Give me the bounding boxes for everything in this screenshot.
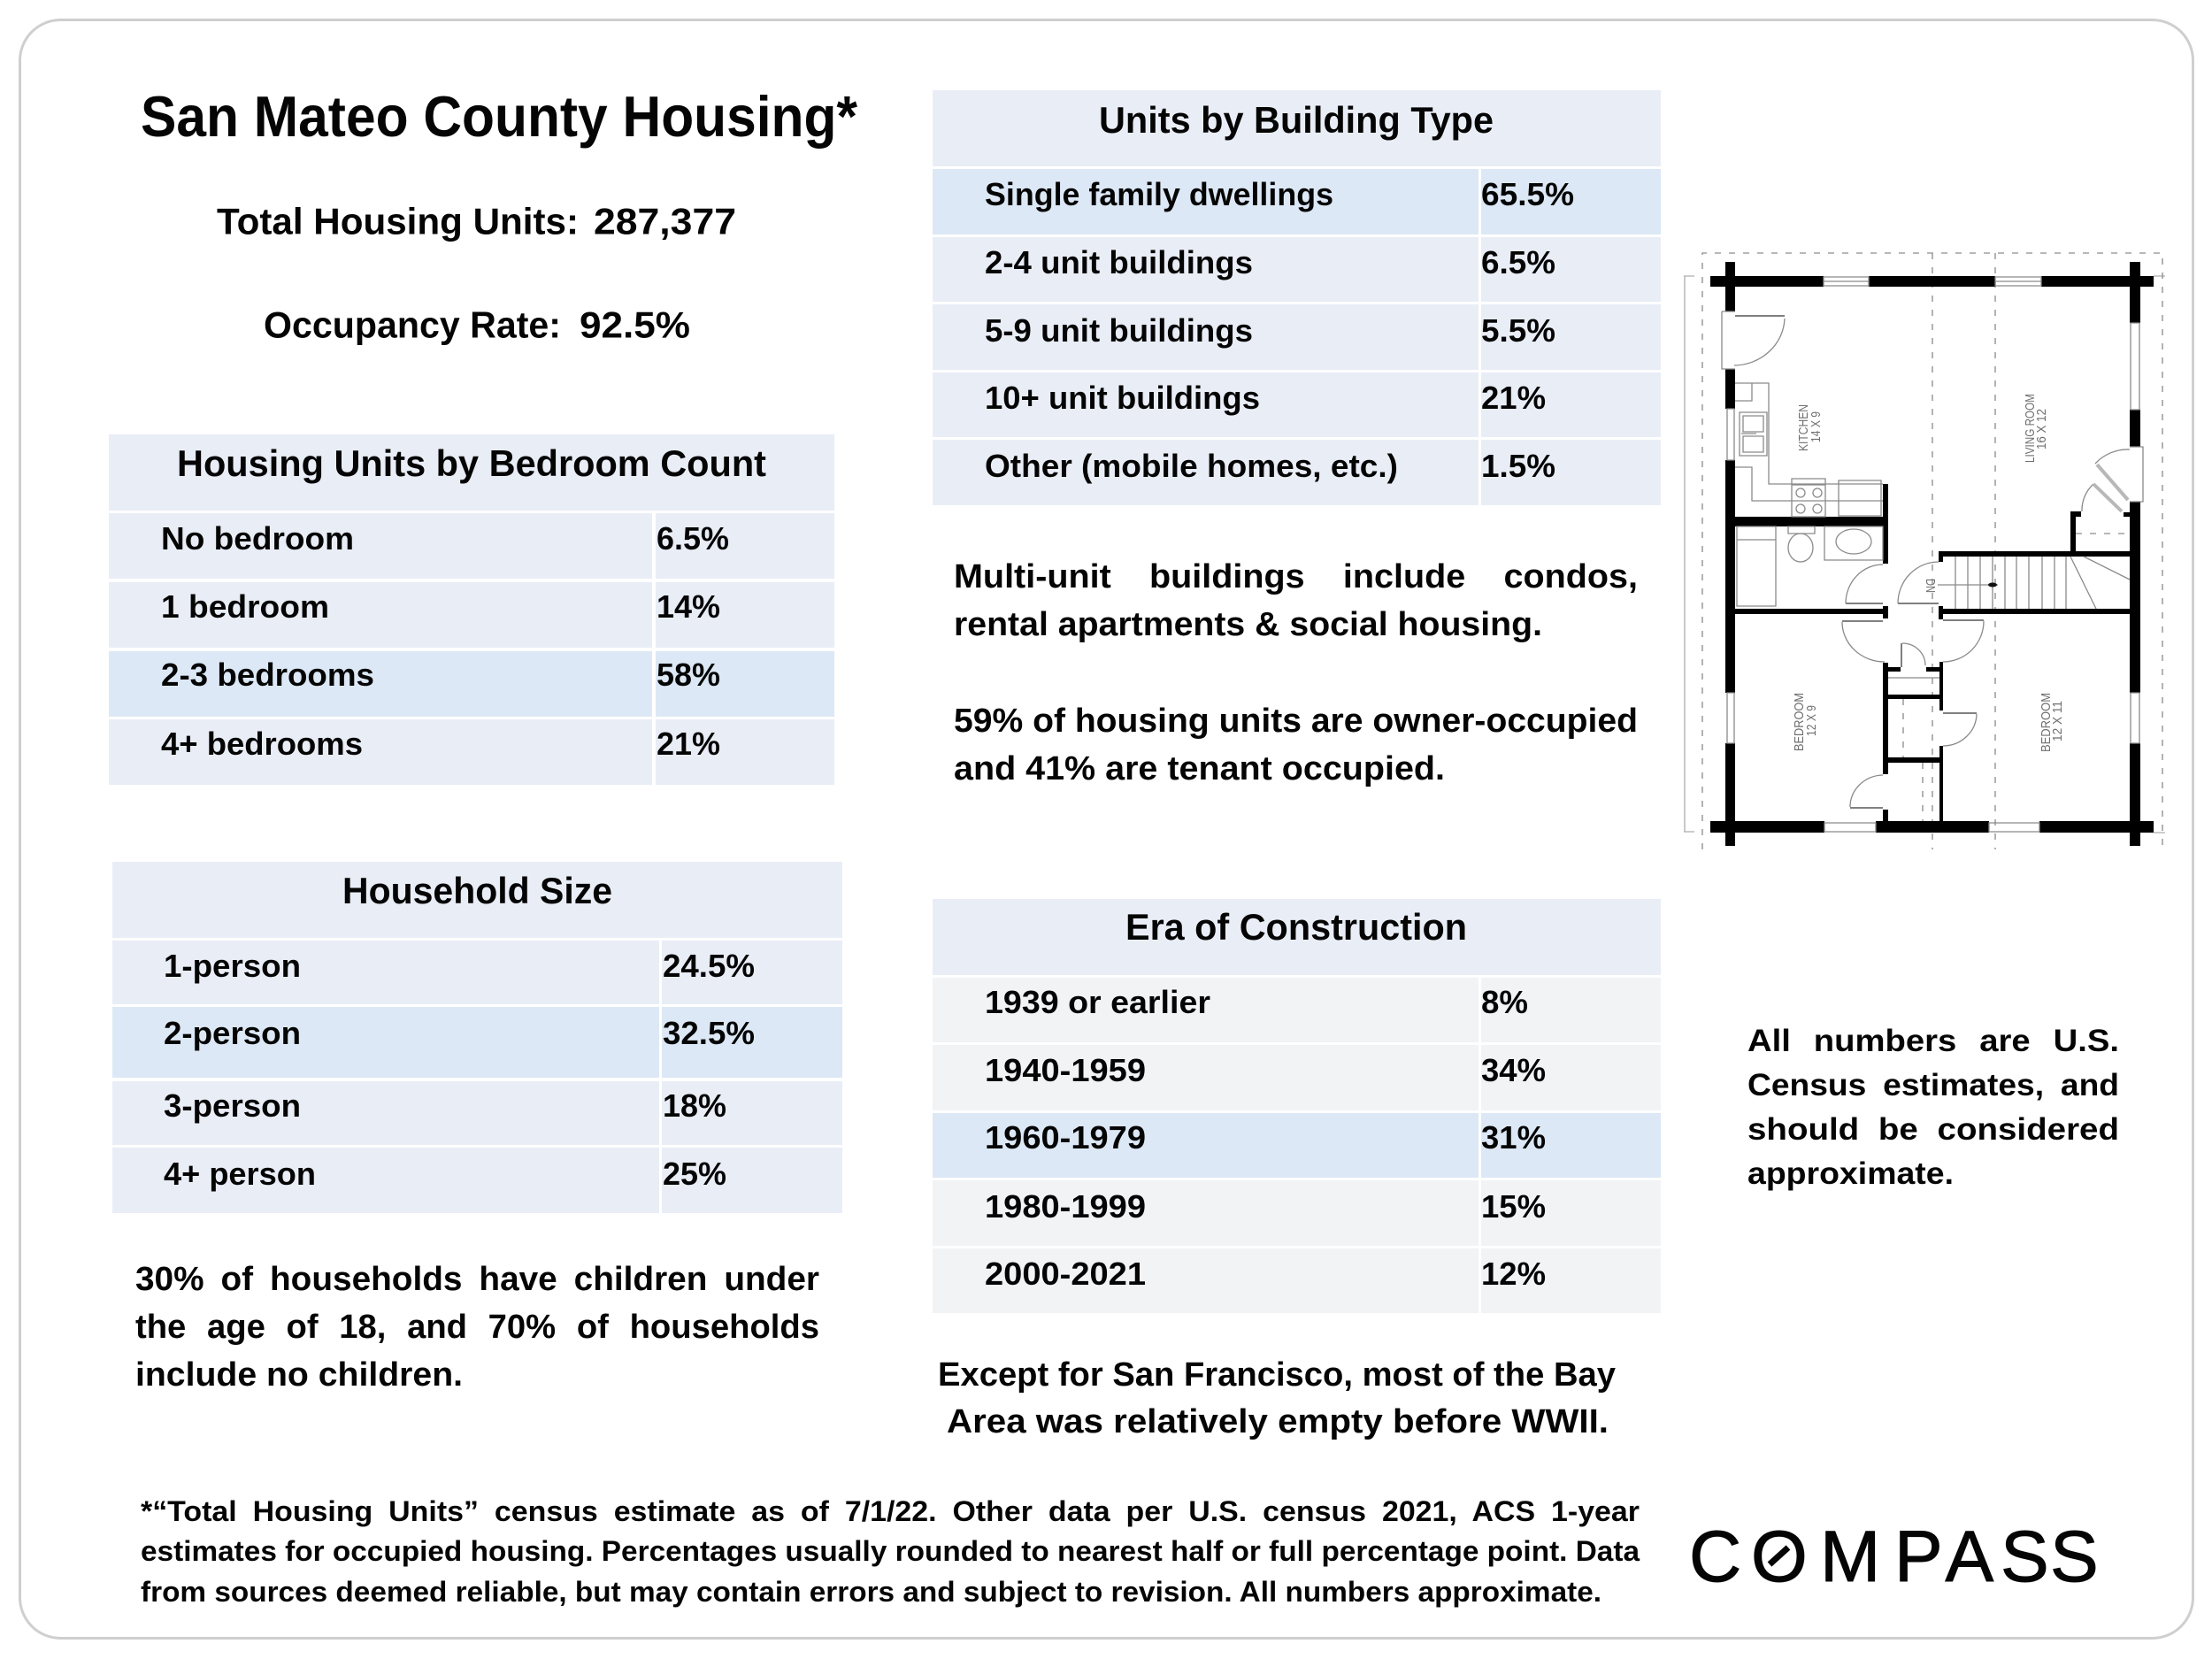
row: 1 bedroom: [161, 588, 720, 625]
row: 1939 or earlier: [985, 984, 1528, 1020]
row: 2-4 unit: 2-4 unit buildings: [985, 244, 1253, 280]
text block: multi-unit buildings: [954, 558, 1638, 643]
text block: multi-unit buildings: Multi-unit buildings include condos,: [954, 558, 1638, 595]
row: 1-person: 24.5%: [663, 948, 755, 984]
row: 2-person: [164, 1015, 755, 1051]
panel: housing units by bedroom count: [109, 434, 834, 785]
row: 1960-1979: 1960-1979: [985, 1119, 1146, 1156]
row: 1940-1959: 1940-1959: [985, 1052, 1146, 1088]
total housing units: Total Housing Units:: [217, 200, 579, 242]
row: 1980-1999: [985, 1188, 1546, 1225]
icon: floor plan: DN: [1923, 579, 1938, 593]
row: 1980-1999: 15%: [1481, 1188, 1546, 1225]
row: single family: Single family dwellings: [985, 176, 1333, 212]
row: 2000-2021: 2000-2021: [985, 1256, 1146, 1292]
row: 10+ unit: 10+ unit buildings: [985, 380, 1260, 416]
panel: era of construction: [933, 899, 1661, 1313]
text block: bay area before WWII: Except for San Francisco, most of the Bay: [938, 1356, 1616, 1394]
icon: floor plan: BEDROOM: [2039, 693, 2054, 752]
text block: bay area before WWII: Area was relatively empty before WWII.: [947, 1403, 1609, 1440]
text block: census note: All numbers are U.S.: [1747, 1024, 2119, 1058]
footnote: *“Total Housing Units” census estimate as of 7/1/22. Other data per U.S. census 2021, ACS 1-year: [141, 1495, 1640, 1527]
row: 3-person: [164, 1087, 726, 1124]
total housing units: [217, 200, 736, 242]
text block: households with children: include no children.: [135, 1356, 463, 1394]
row: 5-9 unit: 5-9 unit buildings: [985, 312, 1253, 349]
text block: census note: should be considered: [1747, 1112, 2119, 1147]
row: 2-person: 2-person: [164, 1015, 301, 1051]
table heading: Era of Construction: [1125, 906, 1467, 948]
icon: floor plan: 14 X 9: [1809, 411, 1824, 442]
text block: multi-unit buildings: rental apartments & social housing.: [954, 606, 1542, 643]
row: 1940-1959: [985, 1052, 1546, 1088]
icon: floor plan: LIVING ROOM: [2023, 394, 2038, 463]
row: 4+ bedrooms: 21%: [657, 726, 720, 762]
row: 3-person: 18%: [663, 1087, 726, 1124]
row: 10+ unit: [985, 380, 1546, 416]
icon: floor plan: 16 X 12: [2034, 409, 2049, 449]
icon: floor plan: KITCHEN: [1796, 404, 1811, 451]
panel: household size: [112, 862, 842, 1213]
row: no bedroom: No bedroom: [161, 520, 354, 557]
row: 4+ bedrooms: 4+ bedrooms: [161, 726, 363, 762]
row: 4+ person: [164, 1156, 726, 1192]
text block: bay area before WWII: [938, 1356, 1616, 1440]
row: 2000-2021: [985, 1256, 1546, 1292]
text block: households with children: 30% of households have children under: [135, 1261, 819, 1298]
text block: households with children: [135, 1261, 819, 1394]
text block: census note: approximate.: [1747, 1156, 1954, 1191]
row: 2-3 bedrooms: 2-3 bedrooms: [161, 657, 374, 693]
row: 1940-1959: 34%: [1481, 1052, 1546, 1088]
icon: floor plan: 12 X 11: [2050, 701, 2065, 741]
row: 1 bedroom: 1 bedroom: [161, 588, 329, 625]
table heading: Housing Units by Bedroom Count: [177, 442, 766, 484]
text block: owner and tenant occupied: 59% of housing units are owner-occupied: [954, 703, 1638, 740]
footnote: estimates for occupied housing. Percentages usually rounded to nearest half or full percentage point. Data: [141, 1535, 1640, 1567]
row: 1960-1979: 31%: [1481, 1119, 1546, 1156]
row: 4+ person: 4+ person: [164, 1156, 316, 1192]
row: 1939 or earlier: 1939 or earlier: [985, 984, 1210, 1020]
row: 1939 or earlier: 8%: [1481, 984, 1528, 1020]
text block: households with children: the age of 18, and 70% of households: [135, 1309, 819, 1346]
row: no bedroom: [161, 520, 729, 557]
row: single family: [985, 176, 1574, 212]
row: 2-4 unit: [985, 244, 1555, 280]
text block: owner and tenant occupied: and 41% are tenant occupied.: [954, 750, 1445, 787]
row: 2-3 bedrooms: [161, 657, 720, 693]
row: 5-9 unit: [985, 312, 1555, 349]
row: 5-9 unit: 5.5%: [1481, 312, 1555, 349]
text block: census note: Census estimates, and: [1747, 1068, 2119, 1102]
row: 2000-2021: 12%: [1481, 1256, 1546, 1292]
title: San Mateo County Housing*: [141, 84, 858, 149]
icon: floor plan: [1684, 253, 2165, 849]
footnote: [141, 1495, 1640, 1608]
row: no bedroom: 6.5%: [657, 520, 729, 557]
icon: floor plan: BEDROOM: [1792, 693, 1807, 751]
total housing units: 287,377: [594, 200, 736, 242]
row: 10+ unit: 21%: [1481, 380, 1546, 416]
row: 2-person: 32.5%: [663, 1015, 755, 1051]
row: 4+ person: 25%: [663, 1156, 726, 1192]
row: 1-person: [164, 948, 755, 984]
occupancy rate: Occupancy Rate:: [264, 304, 561, 345]
row: 2-3 bedrooms: 58%: [657, 657, 720, 693]
row: 2-4 unit: 6.5%: [1481, 244, 1555, 280]
footnote: from sources deemed reliable, but may contain errors and subject to revision. All numbers approximate.: [141, 1576, 1601, 1608]
row: 1 bedroom: 14%: [657, 588, 720, 625]
row: 1960-1979: [985, 1119, 1546, 1156]
text block: census note: [1747, 1024, 2119, 1191]
logo: Compass: COMPASS: [1689, 1517, 2099, 1597]
table heading: Units by Building Type: [1099, 99, 1494, 141]
row: 1-person: 1-person: [164, 948, 301, 984]
row: 1980-1999: 1980-1999: [985, 1188, 1146, 1225]
row: 4+ bedrooms: [161, 726, 720, 762]
table heading: Household Size: [342, 870, 612, 911]
row: 3-person: 3-person: [164, 1087, 301, 1124]
icon: floor plan: 12 X 9: [1804, 705, 1819, 736]
occupancy rate: 92.5%: [580, 304, 690, 345]
text block: owner and tenant occupied: [954, 703, 1638, 787]
row: other: Other (mobile homes, etc.): [985, 448, 1398, 484]
row: other: 1.5%: [1481, 448, 1555, 484]
row: single family: 65.5%: [1481, 176, 1574, 212]
panel: units by building type: [933, 90, 1661, 505]
